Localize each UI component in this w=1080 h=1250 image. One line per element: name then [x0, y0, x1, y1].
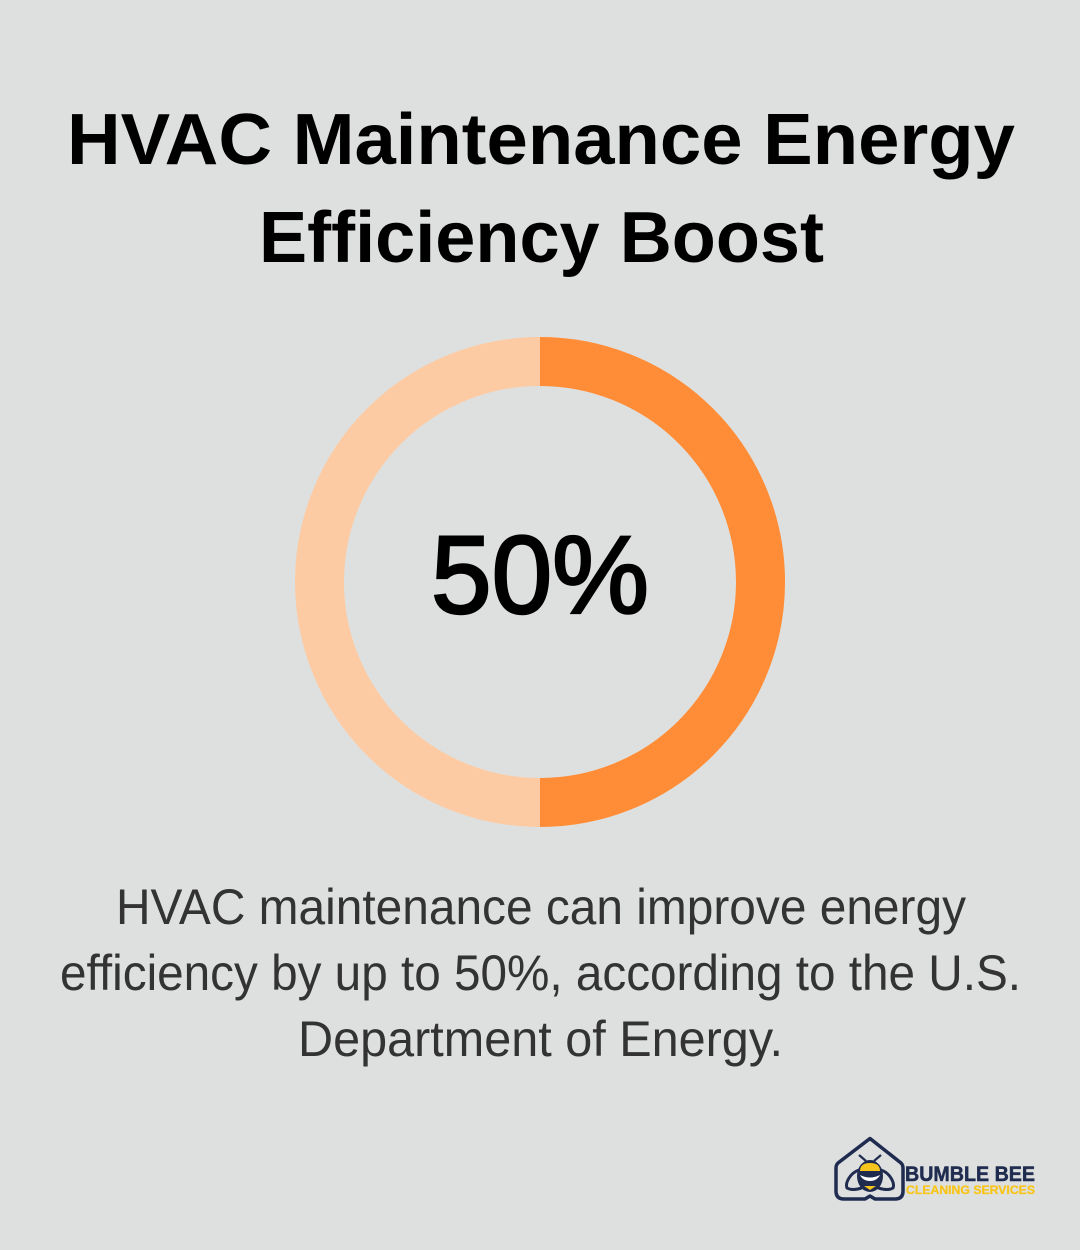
description text: HVAC maintenance can improve energy — [116, 879, 966, 935]
logo: Bumble Bee Cleaning Services — [836, 1138, 1035, 1199]
logo name: BUMBLE BEE — [905, 1163, 1035, 1186]
title: HVAC Maintenance Energy — [67, 100, 1015, 180]
description text — [60, 879, 1021, 1067]
donut value: 50% — [431, 514, 649, 637]
logo tagline: CLEANING SERVICES — [906, 1183, 1035, 1197]
description text: efficiency by up to 50%, according to the U.S. — [60, 945, 1021, 1001]
title — [67, 100, 1015, 278]
description text: Department of Energy. — [298, 1011, 783, 1067]
donut chart — [320, 362, 760, 802]
icon: house with bee — [836, 1138, 903, 1199]
title: Efficiency Boost — [259, 198, 824, 278]
